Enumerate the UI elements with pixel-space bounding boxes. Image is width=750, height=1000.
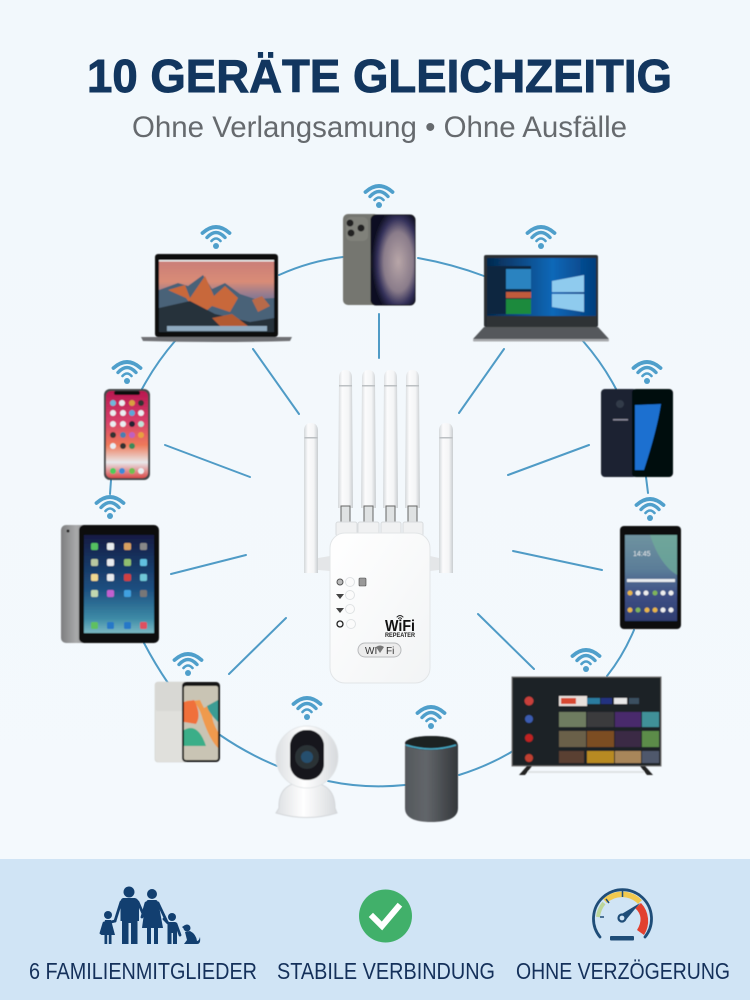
Wi Fi pill button: WI [365, 646, 377, 657]
label: family members: 6 FAMILIENMITGLIEDER [29, 958, 257, 984]
device: iPad [61, 525, 159, 643]
device: Samsung phone pair [601, 389, 673, 477]
icon: green check [359, 890, 412, 942]
wifi icon: Windows laptop [528, 227, 554, 249]
WiFi repeater logo [385, 616, 416, 639]
four tall antennas [336, 370, 423, 536]
wifi icon: MacBook [202, 227, 230, 249]
central WiFi repeater [304, 370, 453, 683]
short right antenna [430, 423, 453, 573]
repeater body [330, 533, 430, 683]
device: MacBook [141, 254, 292, 342]
bottom benefits band [0, 859, 750, 1000]
icon: family [101, 886, 200, 944]
wifi icon: security camera [294, 698, 320, 720]
wifi icon: Samsung tablet [636, 499, 664, 521]
device: iPhone [104, 389, 150, 480]
wifi icon: iPad [96, 497, 124, 519]
device: Samsung tablet: 14:45 [633, 551, 651, 558]
device: smart TV [512, 677, 661, 775]
status LEDs [336, 578, 366, 628]
short left antenna [304, 423, 330, 573]
device: flagship phone pair [343, 214, 415, 305]
device: security camera [276, 726, 338, 818]
device: smart speaker [405, 736, 458, 822]
connection lines: outer ring and radial spokes [110, 257, 648, 786]
device: Samsung tablet [620, 526, 681, 629]
wifi icon: Pixel phone [174, 654, 202, 676]
wifi icon: Samsung phone [634, 362, 660, 384]
wifi icon: smart speaker [418, 707, 444, 729]
subtitle: Ohne Verlangsamung • Ohne Ausfälle [132, 111, 627, 144]
wifi icon: phone [366, 186, 392, 208]
WiFi repeater logo: REPEATER [385, 633, 416, 639]
wifi icon: smart TV [572, 650, 600, 672]
device: Pixel phone pair [155, 682, 220, 762]
wifi icon: iPhone [114, 362, 140, 384]
label: stable connection: STABILE VERBINDUNG [277, 958, 495, 984]
device: Windows laptop [473, 255, 609, 342]
WiFi repeater logo: WiFi [385, 618, 415, 635]
icon: speedometer [594, 890, 652, 940]
Wi Fi pill button: Fi [386, 646, 394, 657]
title: 10 GERÄTE GLEICHZEITIG [87, 50, 672, 102]
Wi Fi pill button [358, 643, 401, 657]
